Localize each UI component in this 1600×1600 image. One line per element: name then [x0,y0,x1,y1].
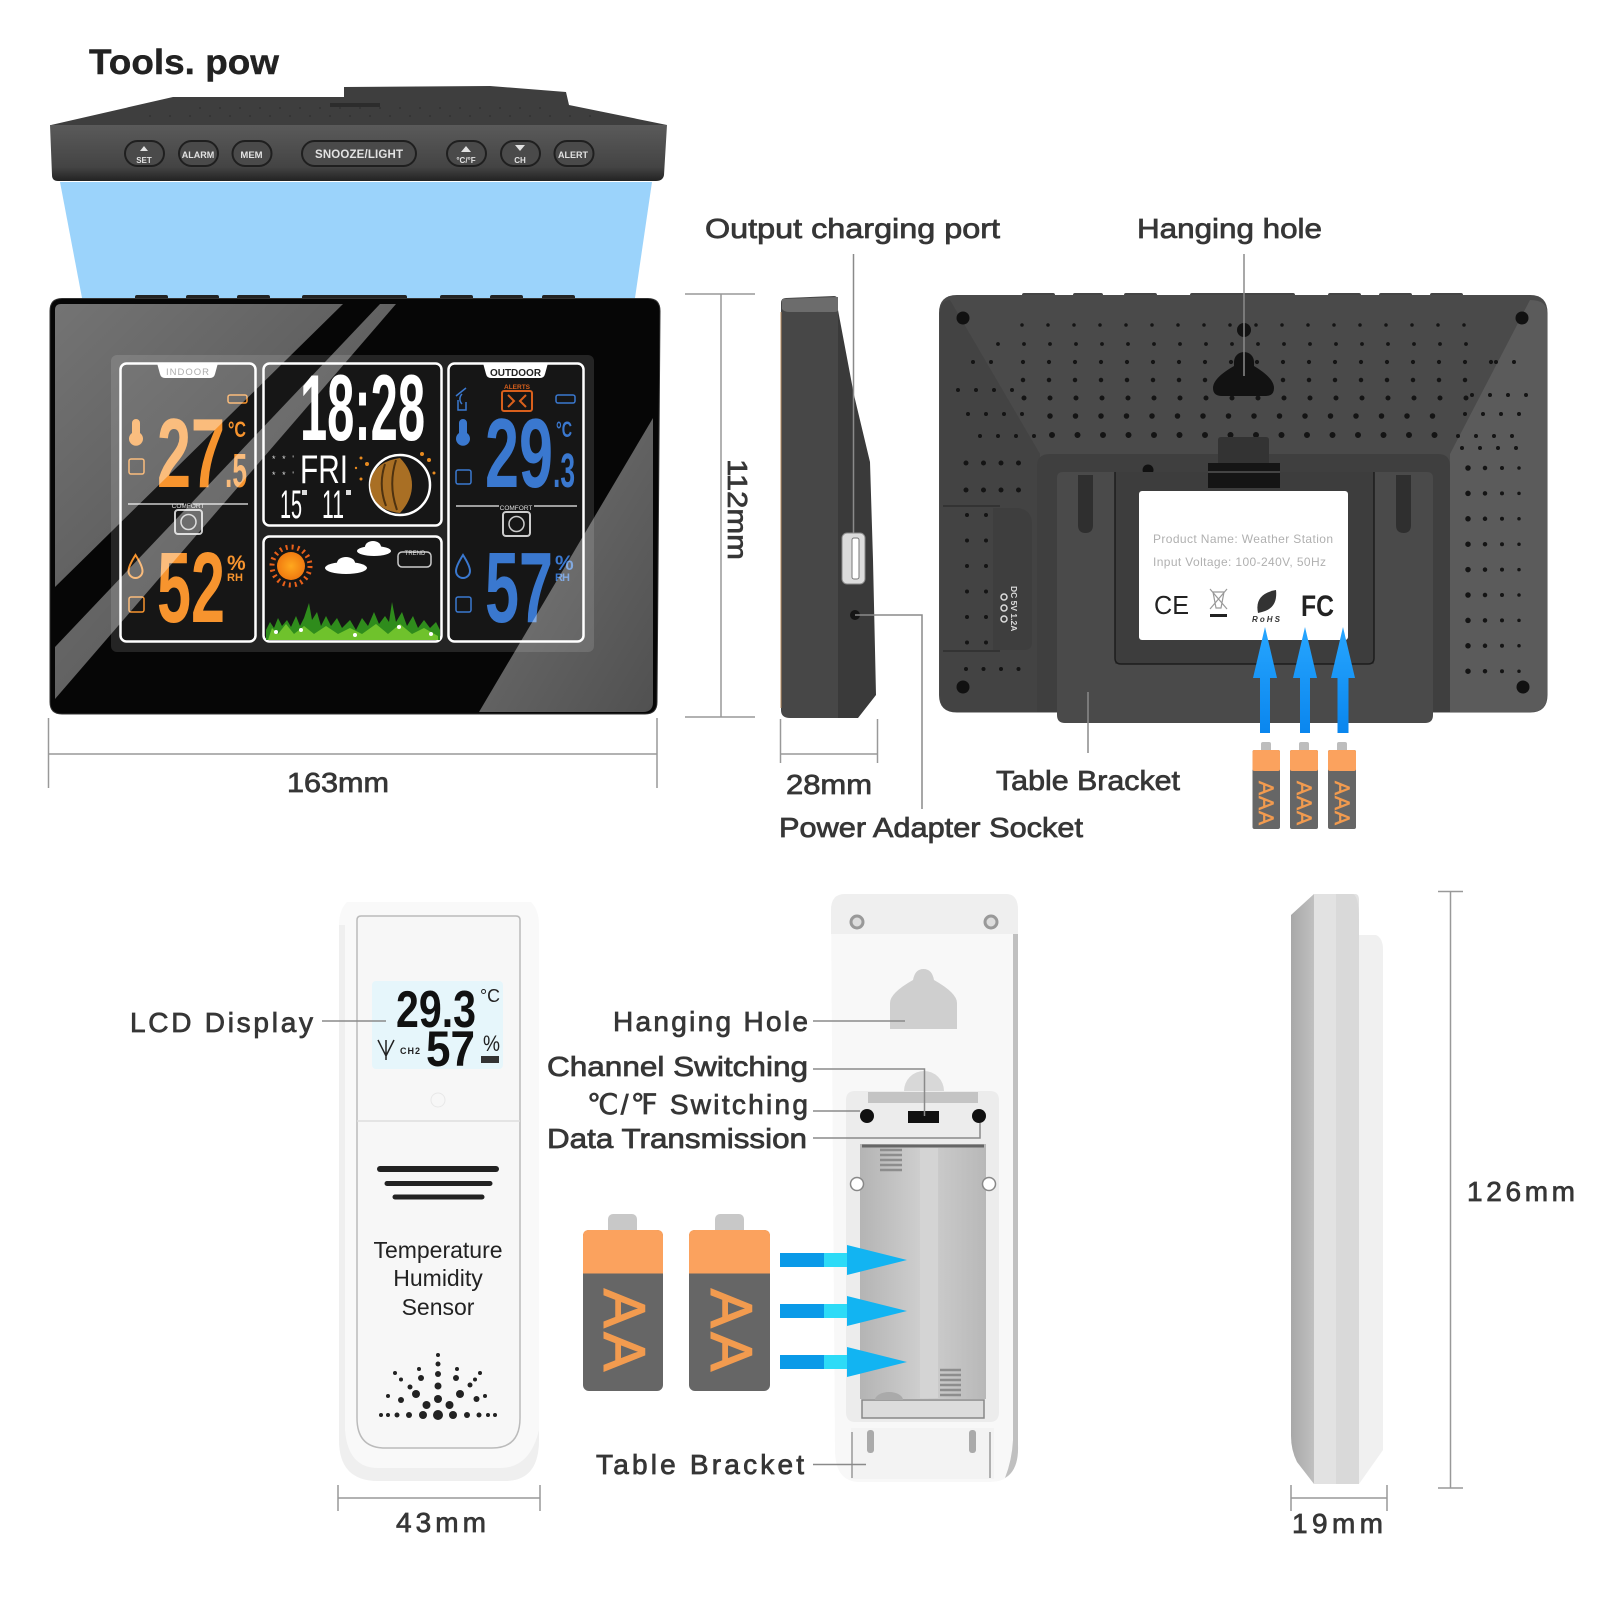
label: table bracket sensor: Table Bracket [596,1449,804,1480]
battery compartment [846,1071,999,1422]
sensor text [373,1237,503,1320]
arrows up to battery compartment [1253,627,1355,733]
sensor back view [780,894,1018,1482]
icon: springs [880,1150,961,1395]
sensor LCD [372,981,503,1077]
sensor LCD: 57 [426,1021,475,1077]
sensor LCD: 29.3 [396,981,476,1039]
panel: indoor: °C [228,417,246,442]
product label: RoHS [1252,615,1281,624]
panel: outdoor: COMFORT [500,505,532,512]
panel: indoor [120,363,256,644]
AA batteries [583,1214,770,1391]
label: channel switching [547,1051,924,1116]
dimension: 43mm [338,1485,540,1538]
sensor text: Humidity [393,1265,483,1291]
panel: clock and moon: FRI [300,448,348,492]
dimension: 112mm: 112mm [722,459,753,560]
panel: outdoor: OUTDOOR [490,368,542,379]
device top edge view with buttons: SNOOZE/LIGHT [315,149,403,161]
panel: clock and moon: 11 [322,483,344,527]
panel: weather forecast [264,536,442,642]
dimension: 163mm [48,718,657,798]
panel: outdoor: °C [556,417,572,442]
label: LCD display: LCD Display [130,1007,313,1038]
clip: DC socket cover [943,506,1032,651]
AA batteries: AA [591,1289,656,1371]
LCD screen backing [111,355,594,652]
perforation dots [958,325,1530,675]
sensor vent lines [380,1169,496,1197]
product label: Input Voltage: 100-240V, 50Hz [1153,555,1326,569]
product label: Product Name: Weather Station [1153,532,1333,546]
panel: outdoor: 57 [485,532,553,644]
label: channel switching: Channel Switching [547,1051,808,1082]
panel: clock and moon [264,355,442,527]
label: power adapter socket [779,615,1083,843]
title: Tools. pow [89,43,280,82]
arrows into compartment [780,1245,907,1377]
AAA batteries: AAA [1330,781,1353,825]
dimension: 126mm [1438,892,1575,1488]
device top edge view with buttons [50,86,667,298]
dimension: 19mm: 19mm [1292,1508,1383,1539]
panel: indoor: .5 [225,445,247,498]
dimension: 28mm [780,719,878,800]
dimension: 43mm: 43mm [396,1507,486,1538]
sensor LCD: °C [480,986,500,1006]
panel: clock and moon: 15 [280,483,302,527]
dimension: 28mm: 28mm [786,769,872,800]
icon: trend [398,551,431,567]
device front view [50,295,660,714]
panel: clock and moon: 18:28 [300,355,425,460]
label: output charging port: Output charging port [705,213,1000,244]
label: data transmission [547,1123,980,1154]
device top edge view with buttons: °C/°F [456,156,476,165]
label: temperature unit switching: ℃/℉ Switching [587,1089,808,1120]
icon: sun [272,547,310,585]
device top edge view with buttons: ALARM [182,150,214,160]
icon: trend: TREND [405,551,426,557]
panel: outdoor [448,363,584,644]
icon: alert [502,384,532,411]
dimension: 163mm: 163mm [287,767,389,798]
panel: clock and moon: **' [272,470,294,480]
panel: outdoor: RH [555,572,570,584]
panel: indoor: INDOOR [166,367,210,378]
panel: indoor: 52 [157,532,225,644]
dimension: 112mm [685,294,755,717]
panel: indoor: COMFORT [172,503,204,510]
lower bracket [851,1428,994,1479]
icon: grass [266,602,440,640]
sensor LCD: CH2 [400,1046,420,1056]
panel: outdoor: .3 [553,445,575,498]
label: table bracket: Table Bracket [996,765,1180,796]
device side view [781,296,876,718]
panel: clock and moon: **' [272,454,294,464]
clip: DC socket cover: DC 5V 1.2A [1009,586,1019,631]
sensor text: Sensor [402,1294,475,1320]
AAA batteries: AAA [1292,781,1315,825]
panel: outdoor: % [555,552,574,575]
device top edge view with buttons: ALERT [558,150,588,160]
AAA batteries: AAA [1254,781,1277,825]
panel: outdoor: 29 [485,398,553,508]
AAA batteries [1252,742,1356,829]
device top edge view with buttons: CH [514,156,526,165]
dimension: 19mm [1291,1485,1387,1539]
panel: indoor: 27 [157,398,225,508]
panel: indoor: RH [227,572,243,584]
label: power adapter socket: Power Adapter Socket [779,812,1083,843]
device top edge view with buttons: MEM [240,150,263,161]
dimension: 126mm: 126mm [1467,1176,1575,1207]
icon: USB port [842,533,865,584]
sensor side view [1291,894,1383,1484]
icon: hanging keyhole [1213,323,1274,396]
table bracket [1057,437,1433,723]
icon: power socket [850,610,860,620]
label: hanging hole: Hanging hole [1137,213,1322,244]
AA batteries: AA [698,1289,763,1371]
label: hanging hole sensor: Hanging Hole [613,1006,808,1037]
product label: CE [1154,590,1189,620]
icon: clouds [325,541,391,574]
panel: indoor: % [227,552,246,575]
sensor dot pattern [379,1353,497,1420]
sensor front view [339,902,539,1481]
device back view [939,293,1548,733]
sensor text: Temperature [373,1237,503,1263]
bracket recess [1037,454,1450,712]
product label: FC [1301,590,1334,623]
icon: sensor hanging hole [890,969,957,1029]
glass reflections [55,304,653,712]
product label [1139,491,1348,640]
icon: alert: ALERTS [504,384,531,391]
sensor LCD: % [483,1031,500,1056]
label: data transmission: Data Transmission [547,1123,807,1154]
device top edge view with buttons: SET [136,156,152,165]
